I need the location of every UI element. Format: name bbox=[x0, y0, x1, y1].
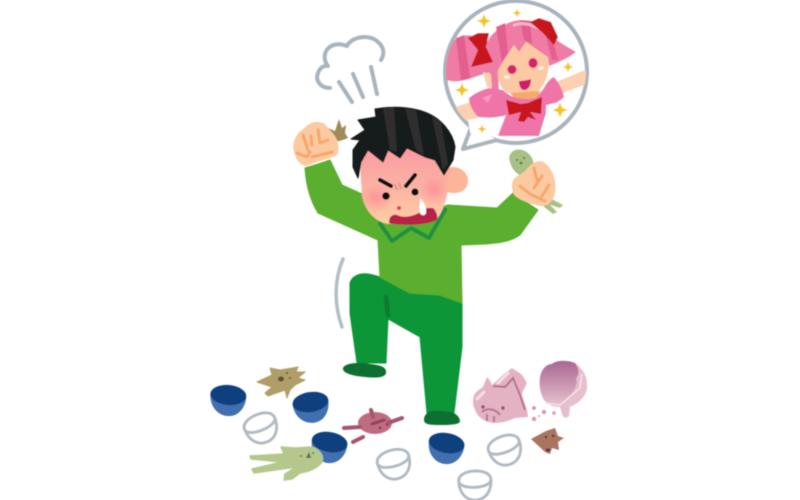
nose bbox=[397, 206, 401, 210]
frown lines bbox=[395, 183, 401, 190]
neck bbox=[510, 91, 540, 102]
broken piggy bank rear shell bbox=[540, 361, 587, 418]
flattened green toy bbox=[250, 447, 323, 480]
toy: green figure legs below right hand bbox=[543, 197, 563, 214]
toy: green figure head in right hand bbox=[509, 150, 534, 178]
broken blue bowl 4 bbox=[425, 430, 466, 467]
broken blue bowl 2 bbox=[291, 390, 331, 425]
man: face bbox=[358, 140, 449, 225]
white bowl 1 bbox=[241, 409, 282, 448]
sparkle stars bbox=[455, 83, 469, 97]
man: right fist bbox=[512, 161, 556, 206]
right hair bow bbox=[530, 18, 558, 45]
man: spiky black hair bbox=[351, 107, 455, 178]
man: collar bbox=[379, 208, 446, 241]
man: left fist bbox=[293, 122, 338, 166]
mouth bbox=[519, 79, 531, 90]
left pigtail bbox=[446, 35, 492, 81]
mouth bbox=[389, 208, 437, 225]
broken blue bowl 1 bbox=[209, 383, 247, 418]
icon: steam puff of anger bbox=[317, 37, 383, 102]
face bbox=[498, 42, 549, 96]
cheeks bbox=[504, 75, 510, 79]
idol figure bbox=[440, 8, 592, 136]
toy: tan figure crushed in left hand bbox=[328, 119, 348, 141]
illustration: angry man stomping on broken collectibles bbox=[210, 0, 590, 500]
eyes bbox=[382, 192, 390, 200]
broken piggy bank front bbox=[473, 368, 528, 423]
man: trousers with raised leg bbox=[343, 274, 462, 425]
white bowl 2 bbox=[375, 446, 414, 483]
raised shoe bbox=[343, 363, 386, 378]
ear bbox=[483, 72, 492, 88]
crushed crimson toy bbox=[344, 410, 402, 442]
white bowl 3 bbox=[485, 431, 526, 470]
man: ear bbox=[447, 167, 468, 193]
white bowl 4 bbox=[458, 470, 492, 500]
broken blue bowl 3 bbox=[308, 429, 349, 466]
man: green sweater bbox=[305, 160, 538, 303]
eyebrows bbox=[380, 175, 415, 186]
red bow at collar bbox=[506, 97, 542, 122]
piggy bank crumbs bbox=[532, 406, 556, 421]
motion line beside raised knee bbox=[336, 259, 343, 327]
dress bbox=[469, 77, 564, 136]
right pigtail and hair top bbox=[486, 20, 576, 92]
planted shoe bbox=[424, 411, 460, 425]
white tear bbox=[420, 198, 426, 215]
crushed tan toy bbox=[257, 367, 305, 398]
left hair bow bbox=[468, 33, 493, 67]
panel: thought bubble with pink-haired idol bbox=[440, 1, 592, 149]
arms bbox=[455, 102, 478, 121]
eyes bbox=[508, 65, 516, 74]
small brown toy fragment bbox=[531, 428, 564, 454]
